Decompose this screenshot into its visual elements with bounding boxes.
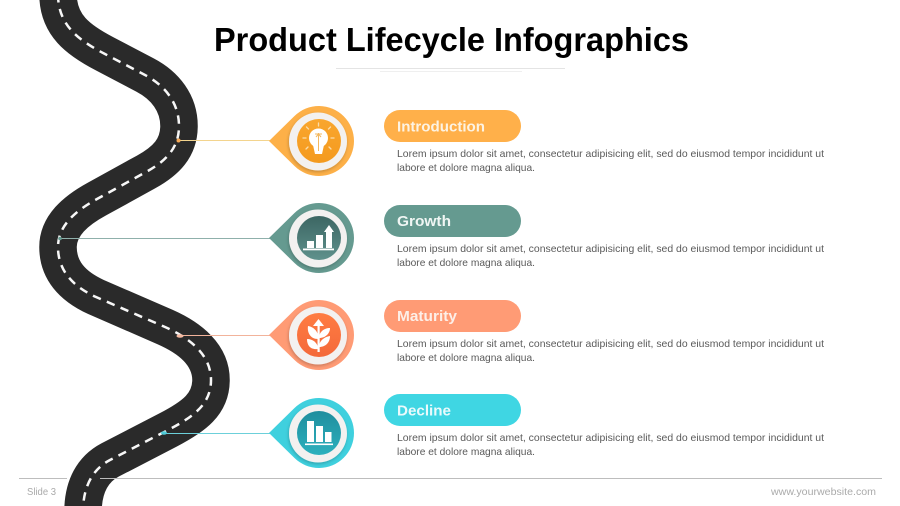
title underline	[336, 68, 565, 72]
pill: introduction	[384, 110, 521, 142]
pill: decline: Decline	[397, 404, 451, 420]
pill: maturity: Maturity	[397, 309, 457, 325]
text: introduction: Lorem ipsum dolor sit amet, consectetur adipisicing elit, sed do eiusmod tempor incididunt ut	[397, 148, 824, 160]
text: maturity: labore et dolore magna aliqua.	[397, 352, 535, 364]
pill: growth	[384, 205, 521, 237]
text: decline: Lorem ipsum dolor sit amet, consectetur adipisicing elit, sed do eiusmod tempor incididunt ut	[397, 432, 824, 444]
footer: www.yourwebsite.com	[770, 487, 876, 498]
pill: maturity	[384, 300, 521, 332]
connector: introduction	[176, 138, 272, 142]
icon: falling bars	[305, 421, 333, 445]
text: maturity: Lorem ipsum dolor sit amet, consectetur adipisicing elit, sed do eiusmod tempor incididunt ut	[397, 338, 824, 350]
text: maturity	[397, 338, 824, 364]
connector: growth	[58, 237, 272, 240]
pin: growth	[269, 203, 354, 273]
icon: light bulb	[303, 123, 334, 154]
text: introduction	[397, 148, 824, 174]
icon: rising bars	[303, 225, 334, 250]
text: growth: Lorem ipsum dolor sit amet, consectetur adipisicing elit, sed do eiusmod tempor incididunt ut	[397, 243, 824, 255]
connector: decline	[161, 431, 272, 435]
footer	[19, 478, 882, 498]
text: decline	[397, 432, 824, 458]
pin: maturity	[269, 300, 354, 370]
pill: decline	[384, 394, 521, 426]
pill: introduction: Introduction	[397, 120, 485, 136]
pill: growth: Growth	[397, 214, 451, 230]
text: growth	[397, 243, 824, 269]
text: decline: labore et dolore magna aliqua.	[397, 446, 535, 458]
connector: maturity	[176, 334, 272, 338]
pin: decline	[269, 398, 354, 468]
text: introduction: labore et dolore magna aliqua.	[397, 162, 535, 174]
title: Product Lifecycle Infographics	[214, 21, 689, 58]
footer: Slide 3	[27, 487, 56, 498]
text: growth: labore et dolore magna aliqua.	[397, 257, 535, 269]
icon: plant with arrow	[307, 319, 330, 352]
pin: introduction	[269, 106, 354, 176]
road	[58, 0, 211, 506]
